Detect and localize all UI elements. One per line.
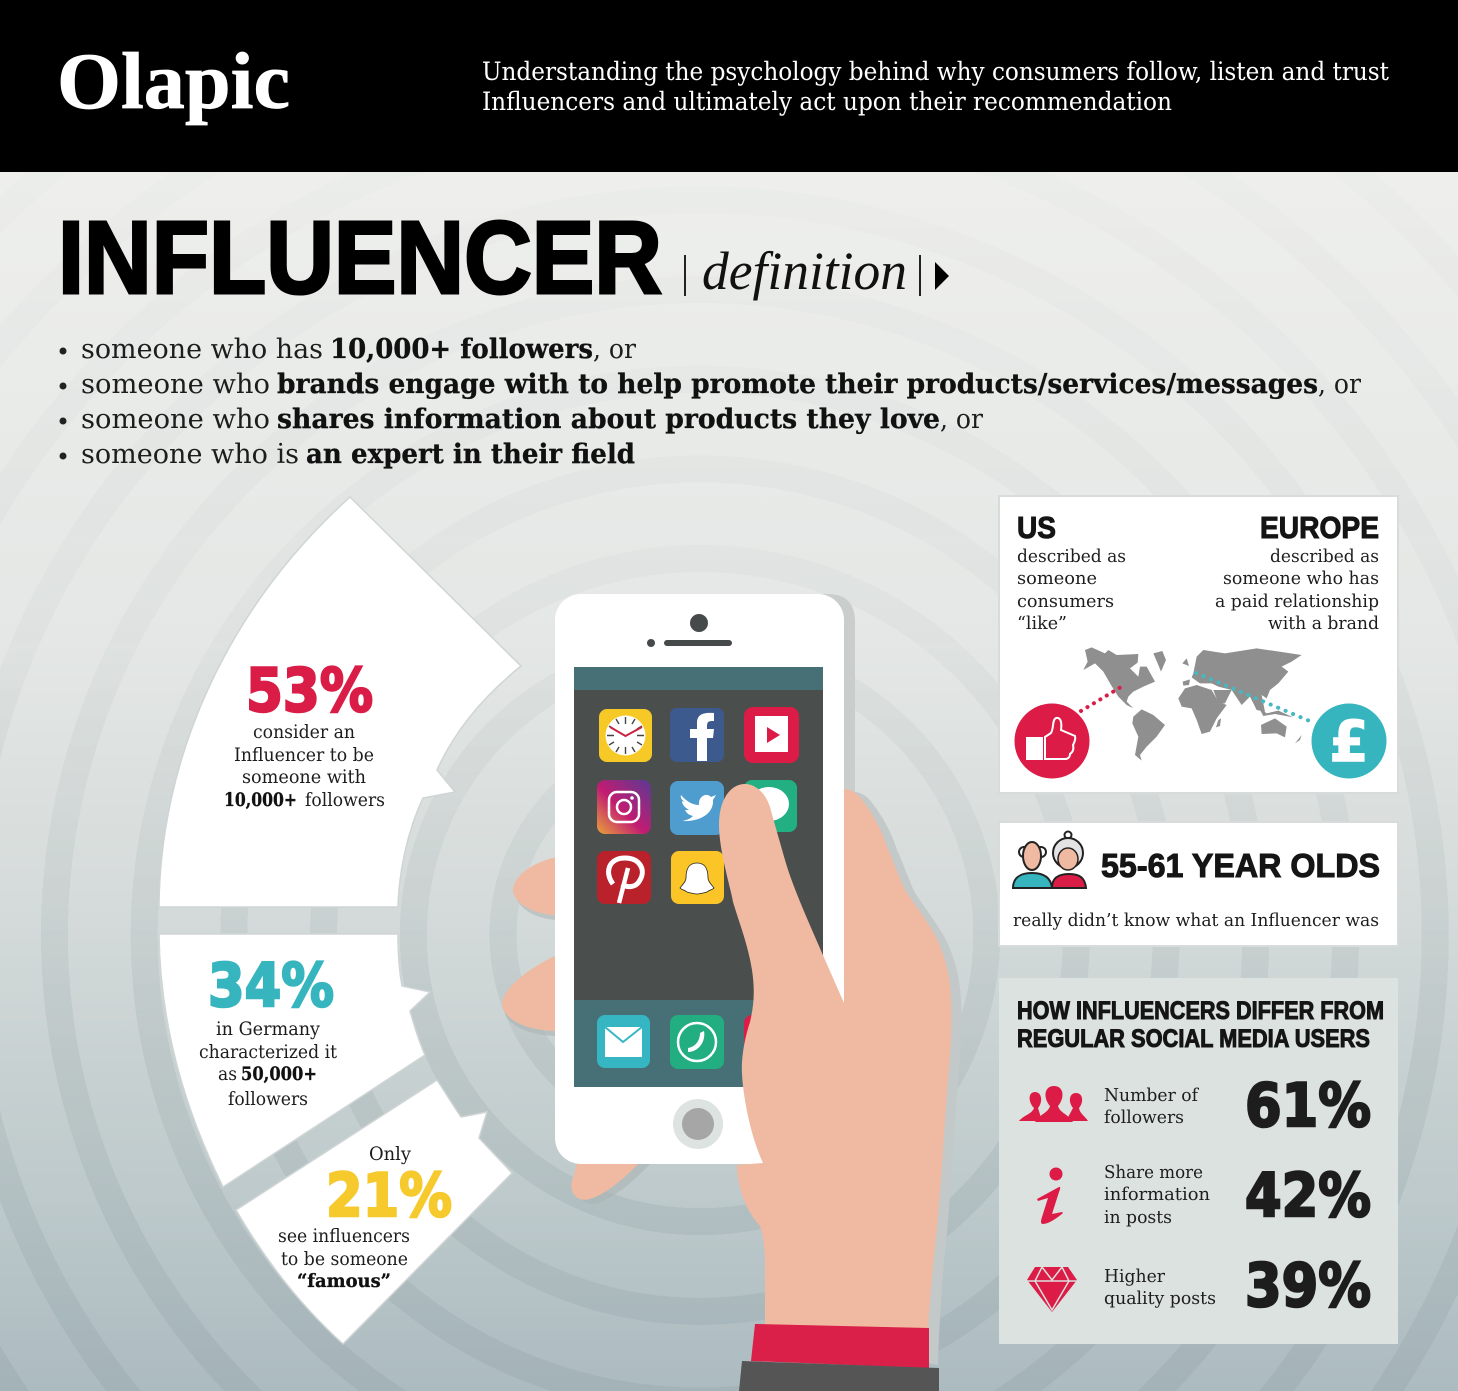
text: 53 percent description: followers [305, 790, 385, 811]
back fingers [502, 857, 642, 1200]
definition bullet list: someone who has [81, 334, 323, 365]
definition bullet list: , or [593, 334, 636, 365]
definition bullet list: an expert in their field [306, 439, 635, 470]
heading: 55-61 year olds: 55-61 YEAR OLDS [1101, 847, 1380, 884]
header tagline: Understanding the psychology behind why consumers follow, listen and trust [482, 57, 1389, 86]
text: 21 percent description: to be someone [281, 1249, 408, 1270]
text: 53 percent description [224, 722, 385, 811]
illustration: hand holding phone [502, 594, 961, 1391]
heading: how influencers differ: HOW INFLUENCERS DIFFER FROM [1017, 997, 1384, 1025]
hand front [719, 784, 951, 1332]
wristband [751, 1324, 929, 1368]
icon: messages app [744, 780, 797, 832]
text: US description: consumers [1017, 591, 1114, 612]
text: 34 percent description: in Germany [216, 1019, 321, 1040]
sleeve [739, 1361, 939, 1391]
text: 34 percent description: followers [228, 1089, 308, 1110]
icon: mail app [597, 1015, 650, 1068]
definition bullet list [60, 334, 1361, 470]
definition bullet list: someone who [81, 369, 270, 400]
panel: 34 percent wedge [159, 934, 430, 1187]
panel: 34 percent wedge: 34% [208, 951, 334, 1021]
text: number of followers: followers [1104, 1107, 1184, 1128]
text: higher quality posts [1104, 1266, 1216, 1309]
dotted line: Europe [1196, 673, 1312, 722]
text: number of followers [1104, 1085, 1199, 1128]
text: Europe description: a paid relationship [1215, 591, 1379, 612]
icon: phone app [670, 1015, 724, 1069]
logo: Olapic: Olapic [57, 38, 290, 126]
heading: how influencers differ [1017, 997, 1384, 1053]
text: 21 percent description: “famous” [297, 1271, 391, 1292]
icon: pound sign [1312, 704, 1386, 778]
heading: INFLUENCER definition: definition [702, 241, 907, 301]
icon: elderly couple [1013, 832, 1086, 888]
panel: 21 percent wedge: 21% [326, 1161, 452, 1231]
icon: Twitter app [670, 781, 724, 835]
text: 34 percent description [199, 1019, 338, 1110]
stat: 61 percent: 61% [1245, 1071, 1371, 1141]
definition bullet list: brands engage with to help promote their products/services/messages [277, 369, 1318, 400]
world map [1083, 647, 1302, 761]
panel: 21 percent wedge [236, 1080, 512, 1344]
back finger shadows [505, 862, 654, 1204]
definition bullet list: , or [1318, 369, 1361, 400]
text: US description: “like” [1017, 613, 1067, 634]
panel: 55-61 year olds [999, 822, 1398, 946]
text: Europe description [1215, 546, 1379, 634]
background concentric rings [0, 745, 1458, 1391]
text: 53 percent description: consider an [253, 722, 355, 743]
icon: Facebook app [670, 708, 724, 762]
heading: INFLUENCER definition: INFLUENCER [58, 200, 662, 315]
text: higher quality posts: quality posts [1104, 1288, 1216, 1309]
text: 53 percent description: 10,000+ [224, 790, 297, 811]
text: 21 percent description: see influencers [278, 1226, 410, 1247]
icon: thumbs up [1014, 704, 1090, 778]
phone [555, 594, 855, 1164]
text: higher quality posts: Higher [1104, 1266, 1165, 1287]
phone home button [673, 1099, 723, 1149]
heading: EUROPE: EUROPE [1260, 510, 1379, 545]
heading: US: US [1017, 510, 1056, 545]
text: 53 percent description: someone with [242, 767, 366, 788]
definition bullet list: , or [940, 404, 983, 435]
icon: video app [744, 707, 799, 763]
text: US description [1017, 546, 1126, 634]
icon: Pinterest app [597, 851, 651, 904]
header tagline [482, 57, 1389, 116]
icon: pound sign: £ [1330, 710, 1368, 775]
panel: 53 percent wedge: 53% [246, 656, 373, 726]
text: 34 percent description: characterized it [199, 1042, 338, 1063]
panel: US vs Europe [999, 496, 1398, 793]
panel: 21 percent wedge: Only [369, 1144, 412, 1165]
panel: how influencers differ [999, 978, 1398, 1344]
definition bullet list: shares information about products they love [277, 404, 940, 435]
icon: Snapchat app [671, 851, 724, 904]
panel: 53 percent wedge [159, 497, 521, 907]
text: age note: really didn’t know what an Influencer was [1013, 910, 1379, 931]
text: 53 percent description: Influencer to be [234, 745, 374, 766]
text: US description: someone [1017, 568, 1097, 589]
stat: 42 percent: 42% [1245, 1161, 1371, 1231]
definition bullet list: 10,000+ followers [330, 334, 593, 365]
icon: diamond [1027, 1267, 1077, 1312]
text: 21 percent description [278, 1226, 410, 1292]
icon: red app behind hand [744, 1015, 774, 1068]
header tagline: Influencers and ultimately act upon their recommendation [482, 87, 1172, 116]
text: Europe description: someone who has [1223, 568, 1379, 589]
text: share more information [1104, 1162, 1210, 1228]
hand shadow [760, 792, 961, 1365]
header band [0, 0, 1458, 172]
icon: followers group [1019, 1086, 1088, 1122]
text: number of followers: Number of [1104, 1085, 1199, 1106]
text: 34 percent description: 50,000+ [241, 1064, 317, 1085]
text: share more information: in posts [1104, 1207, 1172, 1228]
icon: Instagram app [597, 780, 651, 834]
icon: information [1037, 1168, 1063, 1224]
text: share more information: information [1104, 1184, 1210, 1205]
phone speaker and camera [647, 614, 732, 647]
heading: how influencers differ: REGULAR SOCIAL MEDIA USERS [1017, 1025, 1370, 1053]
text: share more information: Share more [1104, 1162, 1203, 1183]
phone screen [574, 667, 823, 1087]
text: 34 percent description: as [218, 1064, 237, 1085]
text: Europe description: with a brand [1268, 613, 1379, 634]
icon: clock app [599, 709, 652, 762]
definition bullet list: someone who is [81, 439, 299, 470]
dotted line: US [1081, 684, 1126, 711]
definition bullet list: someone who [81, 404, 270, 435]
stat: 39 percent: 39% [1245, 1251, 1371, 1321]
text: Europe description: described as [1270, 546, 1379, 567]
text: US description: described as [1017, 546, 1126, 567]
